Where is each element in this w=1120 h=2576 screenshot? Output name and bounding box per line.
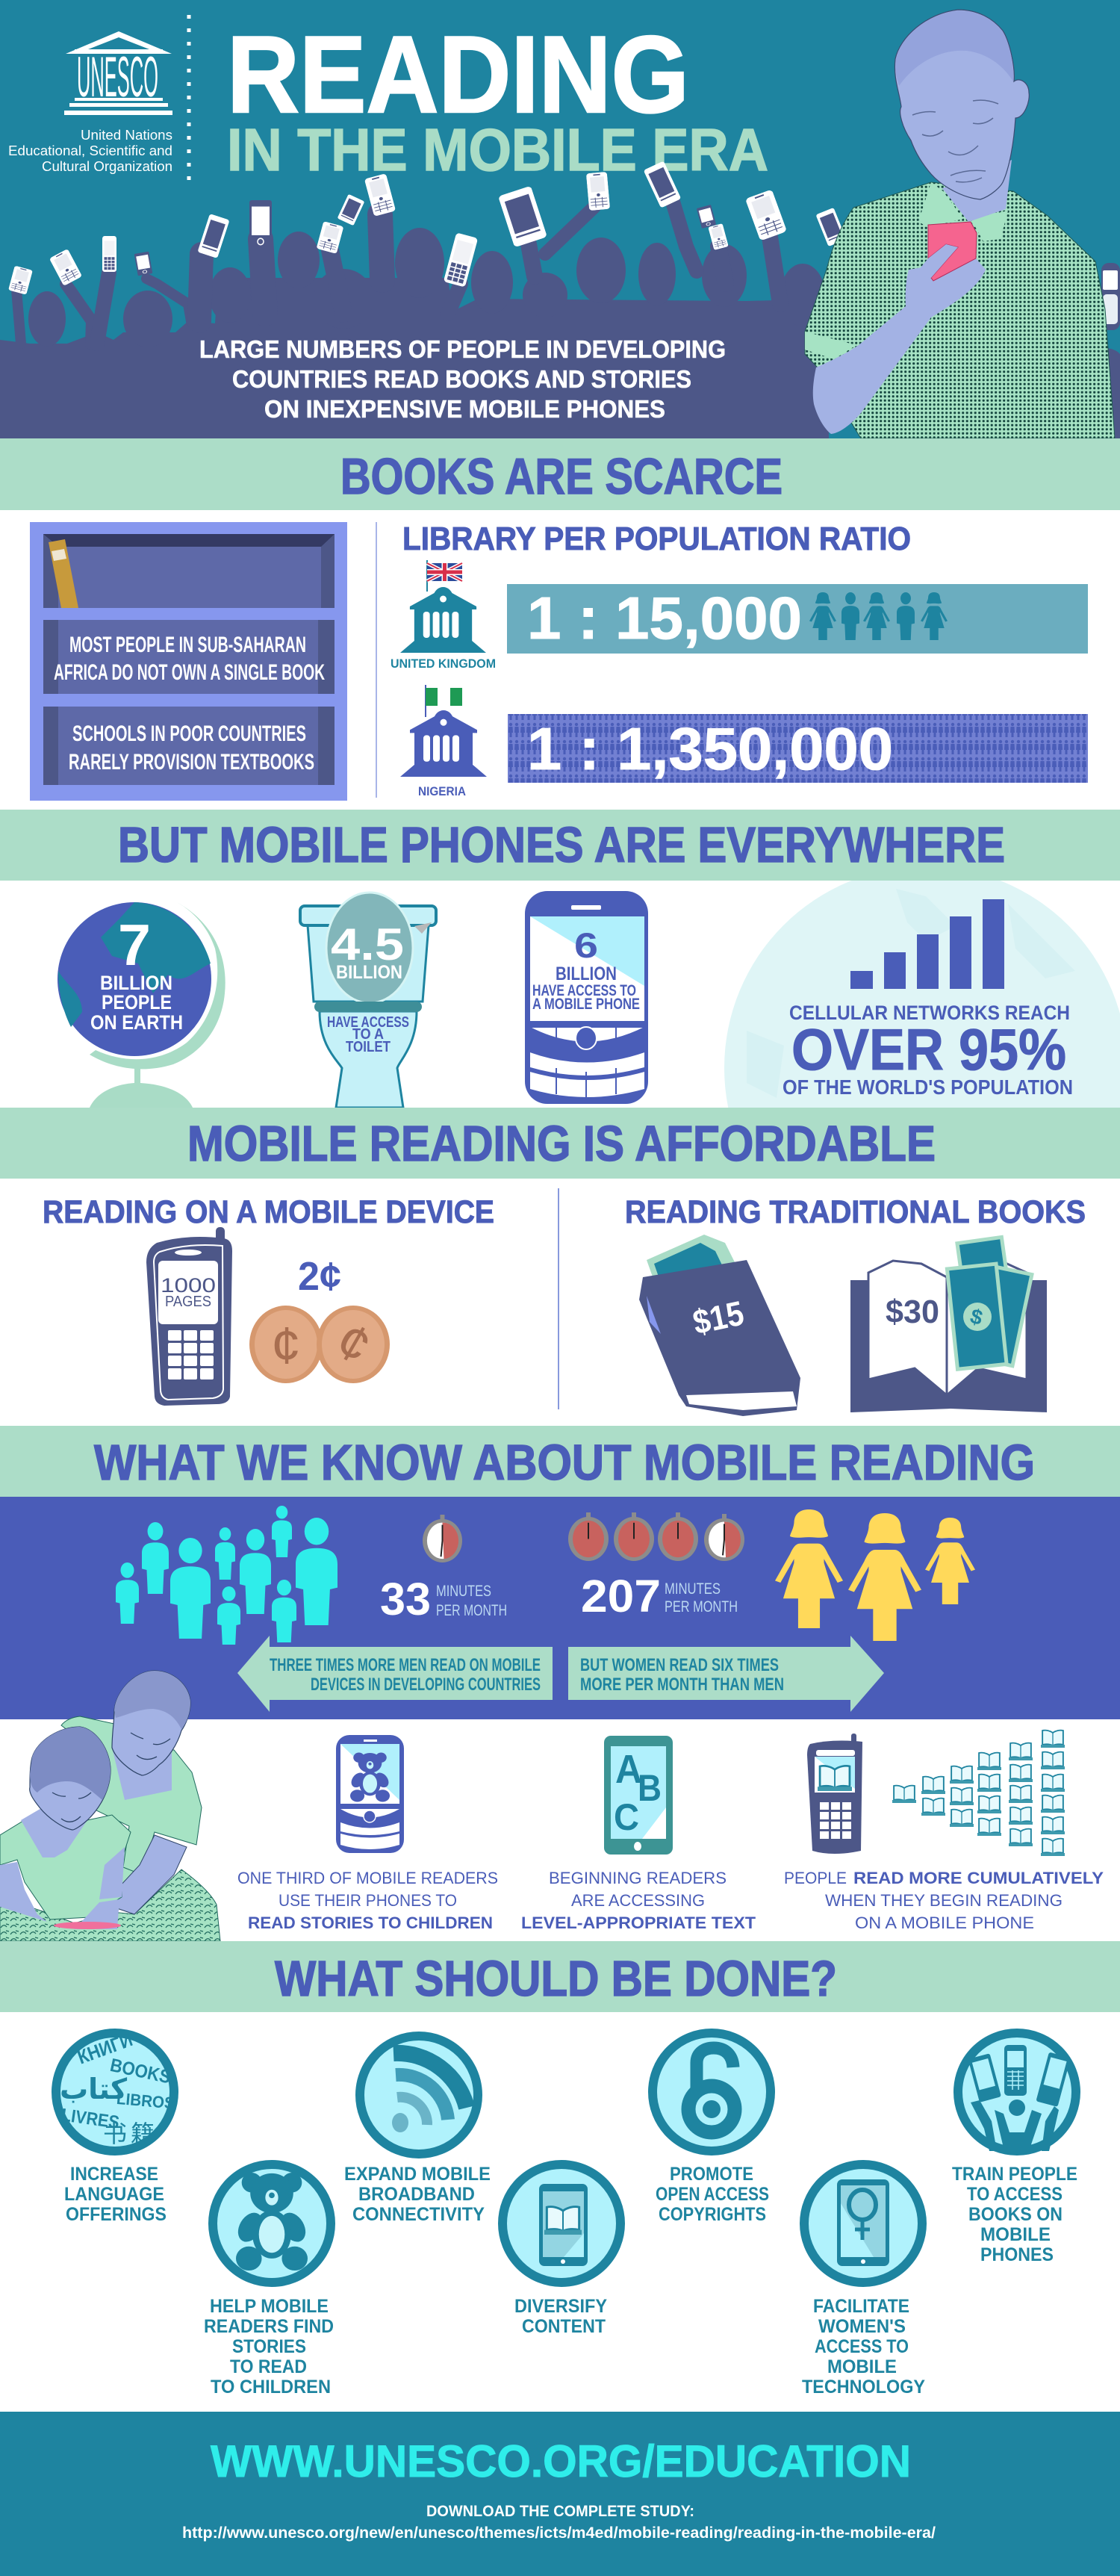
icon: smartphone with 6 billion: A MOBILE PHONE	[532, 996, 640, 1013]
women reading time	[581, 1571, 738, 1621]
men reading time	[380, 1574, 507, 1624]
icon: smartphone with 6 billion: HAVE ACCESS TO	[532, 982, 636, 999]
title: IN THE MOBILE ERA	[227, 117, 768, 183]
label: women's access: MOBILE	[827, 2356, 897, 2377]
icon: tablet with female symbol	[804, 2164, 922, 2282]
raised arms	[16, 202, 780, 344]
section band: books are scarce: BOOKS ARE SCARCE	[340, 448, 783, 505]
shirt	[805, 182, 1115, 438]
icon: wireless signal	[360, 2036, 478, 2154]
text: UNESCO	[77, 46, 158, 109]
icon: many languages: КНИГИ	[75, 2028, 135, 2068]
child chest	[21, 1807, 87, 1857]
label: train people: PHONES	[980, 2244, 1054, 2265]
section band: what we know: WHAT WE KNOW ABOUT MOBILE READING	[94, 1435, 1035, 1491]
label: help readers	[204, 2296, 334, 2397]
label: train people: MOBILE	[980, 2224, 1051, 2245]
child head	[30, 1727, 111, 1830]
icon: open book with money, $30: $	[968, 1304, 986, 1329]
icon: teddy bear circle	[213, 2164, 331, 2282]
label: United Kingdom: UNITED KINGDOM	[391, 657, 496, 671]
men reading time: 33	[380, 1574, 431, 1624]
icon: two coins	[249, 1306, 390, 1383]
label: diversify content	[514, 2296, 607, 2337]
arrow: men read more: DEVICES IN DEVELOPING COUNTRIES	[311, 1675, 541, 1695]
organization name: Educational, Scientific and	[8, 143, 172, 158]
icon: many languages: LIVRES	[60, 2105, 120, 2133]
icon: many languages: BOOKS	[108, 2055, 172, 2088]
banner background	[0, 0, 1120, 438]
icon: paperback book with money, $15: $15	[689, 1293, 747, 1342]
UNESCO logo	[64, 31, 172, 115]
icon: Nigeria library	[400, 710, 487, 777]
adult lap	[105, 1845, 149, 1916]
label: open access	[656, 2164, 769, 2225]
neck	[942, 160, 1012, 222]
text: read more cumulatively: WHEN THEY BEGIN READING	[825, 1891, 1063, 1910]
label: expand broadband	[344, 2164, 491, 2225]
download prompt: DOWNLOAD THE COMPLETE STUDY:	[426, 2503, 694, 2520]
icon: toilet with 4.5 billion: 4.5	[331, 919, 404, 969]
text: read more cumulatively: ON A MOBILE PHONE	[855, 1914, 1034, 1932]
keypad	[168, 1330, 214, 1379]
icon: open access lock	[653, 2033, 771, 2151]
adult shirt	[61, 1716, 202, 1875]
adult arm	[99, 1835, 187, 1914]
panel: what we know	[0, 1497, 1120, 1719]
icon: globe with 7 billion	[57, 902, 225, 1108]
text: level-appropriate text: BEGINNING READERS	[549, 1869, 727, 1887]
icon: toilet with 4.5 billion: TOILET	[346, 1039, 391, 1055]
icon: toilet with 4.5 billion: TO A	[352, 1026, 384, 1043]
signal bars	[850, 899, 1004, 989]
section band: affordable	[0, 1108, 1120, 1179]
child shirt	[0, 1809, 131, 1919]
bar: UK ratio	[507, 584, 1088, 654]
title	[227, 13, 768, 183]
icon: basic phone with 1000 pages	[146, 1227, 232, 1406]
icon: basic phone with 1000 pages: 1000	[161, 1274, 216, 1297]
icon: toilet with 4.5 billion: BILLION	[336, 962, 402, 983]
arrow: women read longer: BUT WOMEN READ SIX TIMES	[580, 1655, 779, 1675]
people icons	[809, 592, 948, 640]
icon: growing grid of books	[892, 1731, 1065, 1856]
right edge phone	[1101, 263, 1120, 330]
hand	[75, 1899, 119, 1929]
bar: Nigeria ratio: 1 : 1,350,000	[527, 716, 893, 782]
icon: smartphone with 6 billion: 6	[574, 925, 598, 965]
label: increase language: OFFERINGS	[66, 2204, 167, 2225]
illustration: adult and child with phone	[0, 1671, 220, 1941]
label: women's access: TECHNOLOGY	[802, 2377, 925, 2397]
icon: many languages: 籍	[131, 2120, 155, 2147]
icon: tablet with ABC	[604, 1736, 673, 1855]
footer	[0, 2412, 1120, 2576]
top shelf with one book	[43, 534, 335, 608]
tagline: LARGE NUMBERS OF PEOPLE IN DEVELOPING	[199, 335, 726, 363]
icon: many languages: LIBROS	[116, 2089, 175, 2113]
icon: paperback book with money, $15	[639, 1235, 800, 1416]
shelf: book ownership: AFRICA DO NOT OWN A SINGLE BOOK	[54, 660, 325, 685]
head	[895, 10, 1029, 199]
face	[912, 100, 998, 182]
icon: stopwatches, women	[568, 1512, 744, 1561]
text: reading stories to children	[237, 1869, 498, 1932]
text: read more cumulatively: PEOPLE	[784, 1869, 847, 1887]
pale globe with signal bars: CELLULAR NETWORKS REACH	[789, 1002, 1070, 1024]
men reading time: MINUTES	[436, 1583, 491, 1600]
icon: smartphone with 6 billion: BILLION	[556, 963, 617, 984]
arrow: women read longer: MORE PER MONTH THAN MEN	[580, 1675, 784, 1695]
boy reading a phone	[805, 10, 1115, 438]
shelf: textbooks: SCHOOLS IN POOR COUNTRIES	[72, 721, 306, 746]
adult head	[112, 1671, 190, 1775]
section band: what should be done: WHAT SHOULD BE DONE?	[275, 1951, 837, 2007]
adult neck	[112, 1748, 172, 1800]
heads	[28, 228, 825, 347]
pale globe with signal bars	[724, 881, 1120, 1108]
label: help readers: TO CHILDREN	[211, 2377, 331, 2397]
child face	[52, 1793, 91, 1822]
adult hair	[114, 1671, 190, 1729]
icon: basic phone with 1000 pages: PAGES	[165, 1294, 211, 1310]
women reading time: 207	[581, 1571, 661, 1621]
icon: basic phone with book	[807, 1734, 862, 1854]
pale globe with signal bars: OVER 95%	[791, 1017, 1066, 1082]
icon: open book with money, $30	[850, 1237, 1047, 1412]
sleeve cuff	[805, 332, 856, 359]
label: women's access	[802, 2296, 925, 2397]
bookcase panel	[30, 522, 347, 801]
icon: globe with 7 billion: PEOPLE	[102, 991, 172, 1014]
label: help readers: HELP MOBILE	[210, 2296, 329, 2317]
child hair	[30, 1727, 111, 1800]
label: increase language: INCREASE	[70, 2164, 158, 2185]
icon: globe with 7 billion: BILLION	[100, 972, 172, 994]
shelf: textbooks	[43, 707, 335, 785]
icon: tablet with ABC: A	[615, 1747, 642, 1792]
hair	[895, 10, 1013, 86]
dotted divider	[187, 15, 191, 188]
icon: phone with teddy bear	[336, 1735, 404, 1853]
label: help readers: READERS FIND	[204, 2316, 334, 2337]
text: level-appropriate text	[521, 1869, 756, 1932]
arrow: women read longer	[568, 1636, 884, 1712]
price: 2 cents: 2¢	[298, 1254, 341, 1299]
icon: people holding phones	[958, 2033, 1076, 2151]
icon: many languages: 书	[103, 2120, 127, 2147]
icon: tablet with ABC: B	[638, 1767, 662, 1809]
icon: smartphone with 6 billion	[525, 891, 648, 1104]
patterned skirt	[0, 1869, 220, 1941]
label: help readers: TO READ	[230, 2356, 307, 2377]
icon: globe with 7 billion: ON EARTH	[90, 1011, 183, 1034]
bar: UK ratio: 1 : 15,000	[527, 585, 802, 651]
label: train people: BOOKS ON	[968, 2204, 1063, 2225]
icon: group of men	[116, 1506, 337, 1645]
icon: Nigeria flag	[426, 685, 462, 717]
title: READING	[227, 13, 689, 135]
heading: traditional books: READING TRADITIONAL BOOKS	[625, 1194, 1086, 1230]
icon: group of women	[775, 1509, 975, 1641]
label: help readers: STORIES	[232, 2336, 306, 2357]
icon: tablet with book	[503, 2164, 620, 2282]
arrow: men read more	[237, 1636, 553, 1712]
section band: affordable: MOBILE READING IS AFFORDABLE	[187, 1116, 936, 1172]
shelf: book ownership	[43, 620, 335, 694]
icon: two coins: ¢	[271, 1316, 301, 1374]
women reading time: MINUTES	[665, 1580, 721, 1598]
library ratio heading: LIBRARY PER POPULATION RATIO	[402, 521, 911, 557]
child arms	[0, 1862, 47, 1922]
organization name	[8, 128, 172, 174]
label: train people: TO ACCESS	[967, 2184, 1063, 2205]
collar	[918, 182, 1008, 241]
icon: globe with 7 billion: 7	[118, 912, 151, 978]
arrow: men read more: THREE TIMES MORE MEN READ ON MOBILE	[270, 1655, 541, 1675]
label: Nigeria: NIGERIA	[418, 784, 466, 798]
label: open access: COPYRIGHTS	[659, 2204, 766, 2225]
label: train people: TRAIN PEOPLE	[952, 2164, 1077, 2185]
label: diversify content: DIVERSIFY	[514, 2296, 607, 2317]
money stack	[947, 1237, 1032, 1369]
men reading time: PER MONTH	[436, 1602, 507, 1619]
icon: stopwatch, men	[423, 1515, 462, 1562]
tagline	[199, 335, 726, 423]
pale globe with signal bars: OF THE WORLD'S POPULATION	[783, 1076, 1073, 1099]
label: women's access: FACILITATE	[813, 2296, 909, 2317]
tagline: ON INEXPENSIVE MOBILE PHONES	[264, 395, 665, 423]
label: expand broadband: EXPAND MOBILE	[344, 2164, 491, 2185]
organization name: United Nations	[81, 128, 172, 143]
label: diversify content: CONTENT	[522, 2316, 606, 2337]
thumb	[915, 244, 958, 278]
section band: phones everywhere: BUT MOBILE PHONES ARE EVERYWHERE	[118, 817, 1005, 873]
label: train people	[952, 2164, 1077, 2265]
label: women's access: WOMEN'S	[818, 2316, 906, 2337]
pink phone	[928, 222, 977, 281]
shelf: textbooks: RARELY PROVISION TEXTBOOKS	[69, 750, 314, 775]
label: increase language	[64, 2164, 167, 2225]
icon: two coins: ¢	[326, 1310, 382, 1376]
icon: many languages: كتاب	[60, 2073, 128, 2105]
heading: mobile device: READING ON A MOBILE DEVICE	[43, 1194, 494, 1230]
shelf: book ownership: MOST PEOPLE IN SUB-SAHARAN	[69, 633, 306, 657]
organization name: Cultural Organization	[42, 159, 172, 174]
icon: open book with money, $30: $30	[886, 1294, 939, 1330]
icon: toilet with 4.5 billion	[300, 893, 436, 1108]
pink phone	[54, 1922, 121, 1929]
label: women's access: ACCESS TO	[815, 2336, 909, 2357]
icon: tablet with ABC: C	[614, 1796, 639, 1838]
label: increase language: LANGUAGE	[64, 2184, 164, 2205]
text: reading stories to children: USE THEIR PHONES TO	[279, 1891, 457, 1910]
text: reading stories to children: ONE THIRD OF MOBILE READERS	[237, 1869, 498, 1887]
icon: UK flag	[427, 560, 462, 592]
icon: toilet with 4.5 billion: HAVE ACCESS	[327, 1014, 409, 1031]
text: level-appropriate text: ARE ACCESSING	[571, 1891, 705, 1910]
text: read more cumulatively	[784, 1869, 1104, 1932]
label: expand broadband: CONNECTIVITY	[352, 2204, 485, 2225]
tagline: COUNTRIES READ BOOKS AND STORIES	[232, 365, 691, 393]
label: open access: PROMOTE	[670, 2164, 753, 2185]
label: expand broadband: BROADBAND	[358, 2184, 475, 2205]
study url: http://www.unesco.org/new/en/unesco/themes/icts/m4ed/mobile-reading/reading-in-the-mobile-era/	[182, 2524, 936, 2542]
phones held up	[8, 161, 847, 295]
adult face	[131, 1733, 170, 1760]
icon: UK library	[400, 587, 486, 653]
label: open access: OPEN ACCESS	[656, 2184, 769, 2205]
section band: books are scarce	[0, 438, 1120, 510]
crowd silhouette	[0, 161, 1120, 438]
arm and hand	[813, 258, 986, 434]
text: read more cumulatively: READ MORE CUMULATIVELY	[853, 1869, 1104, 1887]
icon: many languages	[56, 2028, 175, 2151]
women reading time: PER MONTH	[665, 1598, 738, 1616]
section band: what should be done	[0, 1941, 1120, 2012]
bar: Nigeria ratio	[508, 714, 1088, 783]
website: WWW.UNESCO.ORG/EDUCATION	[211, 2436, 911, 2486]
text: reading stories to children: READ STORIES TO CHILDREN	[248, 1914, 493, 1932]
text: level-appropriate text: LEVEL-APPROPRIATE TEXT	[521, 1914, 756, 1932]
